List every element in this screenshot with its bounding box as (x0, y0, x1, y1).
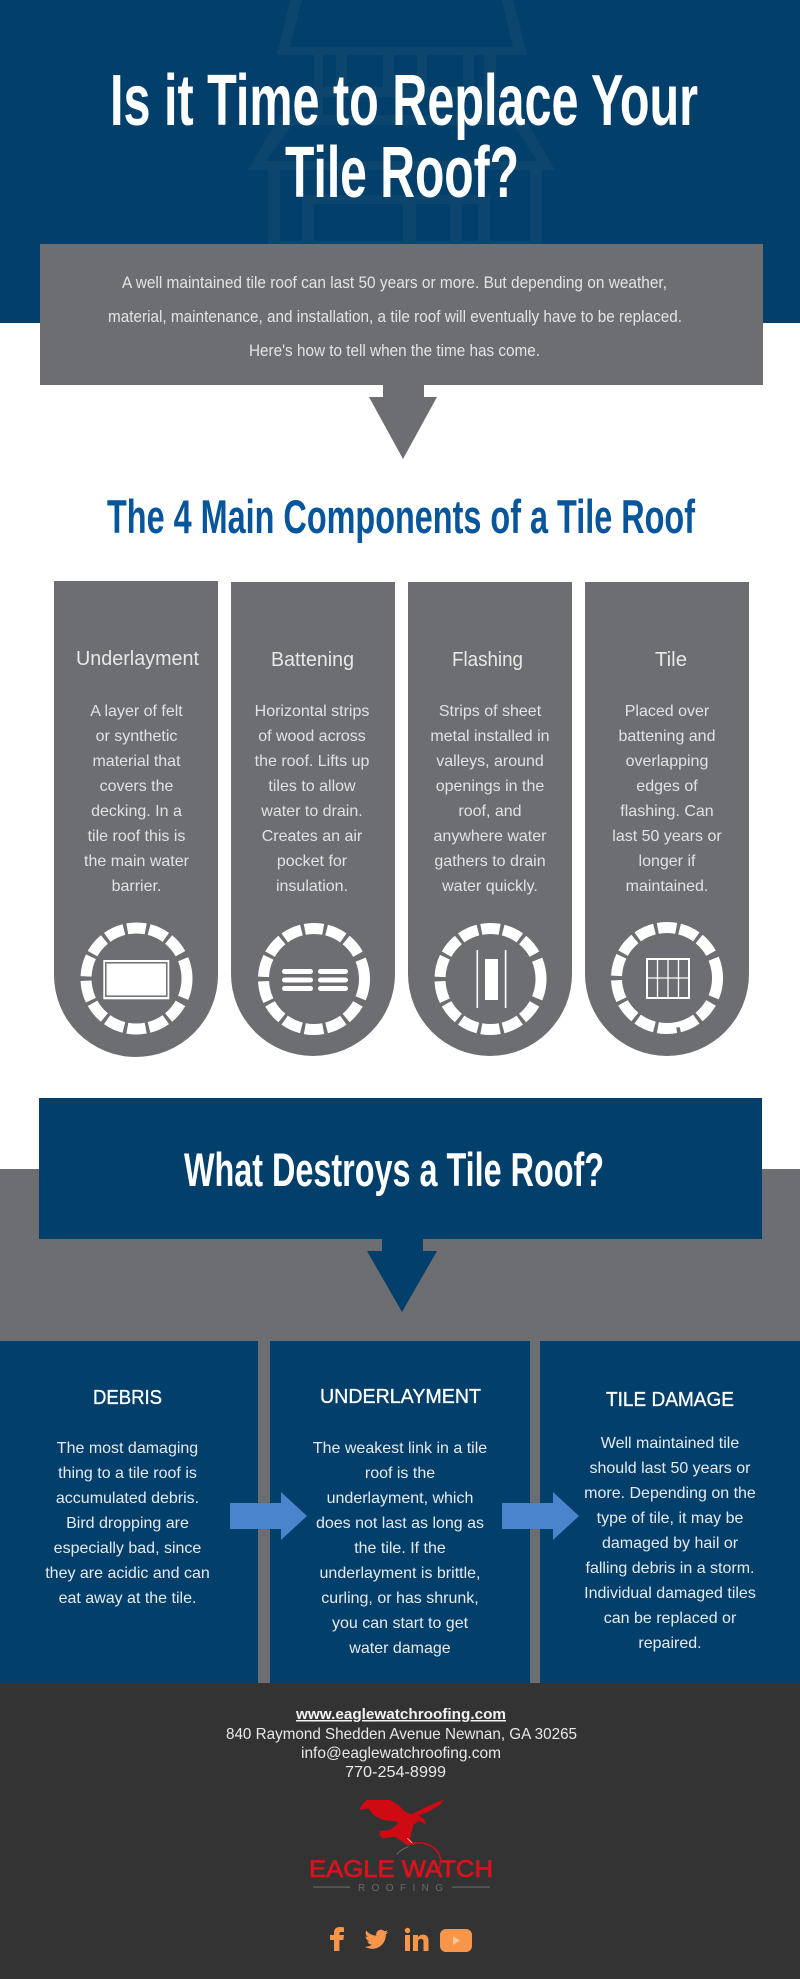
panel: underlayment (270, 1341, 530, 1683)
card text: flashing: water quickly. (441, 878, 538, 895)
card text: tile: edges of (636, 778, 698, 795)
heading: tile damage: TILE DAMAGE (606, 1389, 734, 1411)
heading: debris: DEBRIS (93, 1387, 162, 1409)
text: tile damage: repaired. (638, 1635, 702, 1652)
text: tile damage: can be replaced or (604, 1610, 737, 1627)
house watermark (248, 0, 555, 245)
card text: flashing: valleys, around (436, 753, 544, 770)
panel: battening card (231, 582, 395, 1056)
card text: flashing: anywhere water (434, 828, 547, 845)
card heading: battening: Battening (271, 649, 354, 671)
card text: battening: of wood across (258, 728, 366, 745)
card text: tile: Placed over (625, 703, 710, 720)
text: debris: they are acidic and can (45, 1565, 210, 1582)
icon: eagle (359, 1799, 444, 1871)
card text: underlayment: A layer of felt (90, 703, 183, 720)
text: debris: thing to a tile roof is (58, 1465, 197, 1482)
card text: battening: insulation. (276, 878, 348, 895)
text: tile damage: falling debris in a storm. (586, 1560, 754, 1577)
text: underlayment: does not last as long as (316, 1515, 484, 1532)
card text: underlayment: decking. In a (91, 803, 182, 820)
text: tile damage: type of tile, it may be (597, 1510, 743, 1527)
logo: eagle watch roofing: ROOFING (358, 1883, 443, 1894)
card text: tile: longer if (639, 853, 696, 870)
text: debris: especially bad, since (54, 1540, 201, 1557)
text: tile damage: Well maintained tile (601, 1435, 739, 1452)
header panel (0, 0, 800, 323)
card text: tile: battening and (619, 728, 715, 745)
icon: flashing (432, 920, 549, 1038)
text: tile damage: more. Depending on the (584, 1485, 756, 1502)
intro text: Here's how to tell when the time has come. (249, 341, 540, 360)
text: tile damage: damaged by hail or (602, 1535, 739, 1552)
icon: facebook (330, 1927, 344, 1951)
icon: youtube (440, 1929, 472, 1952)
text: underlayment: roof is the (365, 1465, 435, 1482)
card text: flashing: metal installed in (430, 728, 550, 745)
card text: underlayment: tile roof this is (88, 828, 185, 845)
panel: what destroys a tile roof (39, 1098, 762, 1239)
icon: tile (608, 919, 726, 1037)
text: underlayment: underlayment is brittle, (320, 1565, 480, 1582)
icon: underlayment (78, 920, 195, 1037)
contact details (226, 1706, 577, 1781)
card text: tile: last 50 years or (612, 828, 722, 845)
contact details: 770-254-8999 (345, 1764, 446, 1781)
text: debris: Bird dropping are (66, 1515, 189, 1532)
main title (110, 61, 698, 213)
text: underlayment: the tile. If the (354, 1540, 446, 1557)
panel: footer (0, 1683, 800, 1979)
heading: underlayment: UNDERLAYMENT (320, 1386, 481, 1408)
card text: tile: flashing. Can (620, 803, 714, 820)
text: underlayment: underlayment, which (327, 1490, 473, 1507)
social icons (330, 1927, 472, 1952)
card text: flashing: roof, and (458, 803, 522, 820)
panel: flashing card (408, 582, 572, 1056)
contact details: 840 Raymond Shedden Avenue Newnan, GA 30265 (226, 1726, 577, 1743)
arrow: intro down (369, 385, 437, 459)
heading: what destroys: What Destroys a Tile Roof? (184, 1143, 604, 1196)
card text: underlayment: or synthetic (96, 728, 177, 745)
intro text (108, 273, 682, 360)
panel: underlayment card (54, 581, 218, 1057)
text: underlayment: water damage (348, 1640, 451, 1657)
arrow: destroys down (367, 1239, 437, 1312)
card text: underlayment: the main water (84, 853, 190, 870)
main title: Tile Roof? (285, 133, 519, 213)
card text: battening: Horizontal strips (255, 703, 369, 720)
intro panel (40, 244, 763, 385)
card text: battening: water to drain. (260, 803, 363, 820)
text: debris: The most damaging (57, 1440, 198, 1457)
text: tile damage: Individual damaged tiles (584, 1585, 756, 1602)
panel: debris (0, 1341, 258, 1683)
card text: battening: tiles to allow (268, 778, 356, 795)
icon: twitter (365, 1930, 388, 1949)
intro text: material, maintenance, and installation, a tile roof will eventually have to be replaced. (108, 307, 682, 326)
card heading: flashing: Flashing (452, 649, 523, 671)
card text: flashing: gathers to drain (434, 853, 546, 870)
icon: battening (255, 920, 373, 1038)
panel: tile card (585, 582, 749, 1056)
text: tile damage: should last 50 years or (590, 1460, 751, 1477)
card heading: underlayment: Underlayment (76, 648, 199, 670)
text: debris: eat away at the tile. (59, 1590, 196, 1607)
contact details: www.eaglewatchroofing.com (295, 1706, 506, 1723)
card text: underlayment: material that (92, 753, 181, 770)
card text: tile: maintained. (626, 878, 708, 895)
card text: underlayment: barrier. (112, 878, 161, 895)
card text: tile: overlapping (626, 753, 708, 770)
card heading: tile: Tile (655, 649, 687, 671)
card text: battening: Creates an air (262, 828, 363, 845)
card text: flashing: Strips of sheet (439, 703, 542, 720)
text: underlayment: you can start to get (332, 1615, 469, 1632)
card text: battening: the roof. Lifts up (255, 753, 369, 770)
arrow: underlayment to tile damage (502, 1492, 579, 1540)
card text: battening: pocket for (277, 853, 348, 870)
card text: underlayment: covers the (100, 778, 174, 795)
panel: tile damage (540, 1341, 800, 1683)
text: underlayment: curling, or has shrunk, (321, 1590, 479, 1607)
text: underlayment: The weakest link in a tile (313, 1440, 487, 1457)
intro text: A well maintained tile roof can last 50 years or more. But depending on weather, (122, 273, 667, 292)
grey band (0, 1169, 800, 1683)
card text: flashing: openings in the (436, 778, 544, 795)
arrow: debris to underlayment (230, 1492, 307, 1540)
contact details: info@eaglewatchroofing.com (301, 1745, 501, 1762)
logo: eagle watch roofing: EAGLE WATCH (309, 1856, 493, 1883)
logo: eagle watch roofing (309, 1799, 493, 1894)
text: debris: accumulated debris. (56, 1490, 199, 1507)
icon: linkedin (405, 1928, 428, 1951)
